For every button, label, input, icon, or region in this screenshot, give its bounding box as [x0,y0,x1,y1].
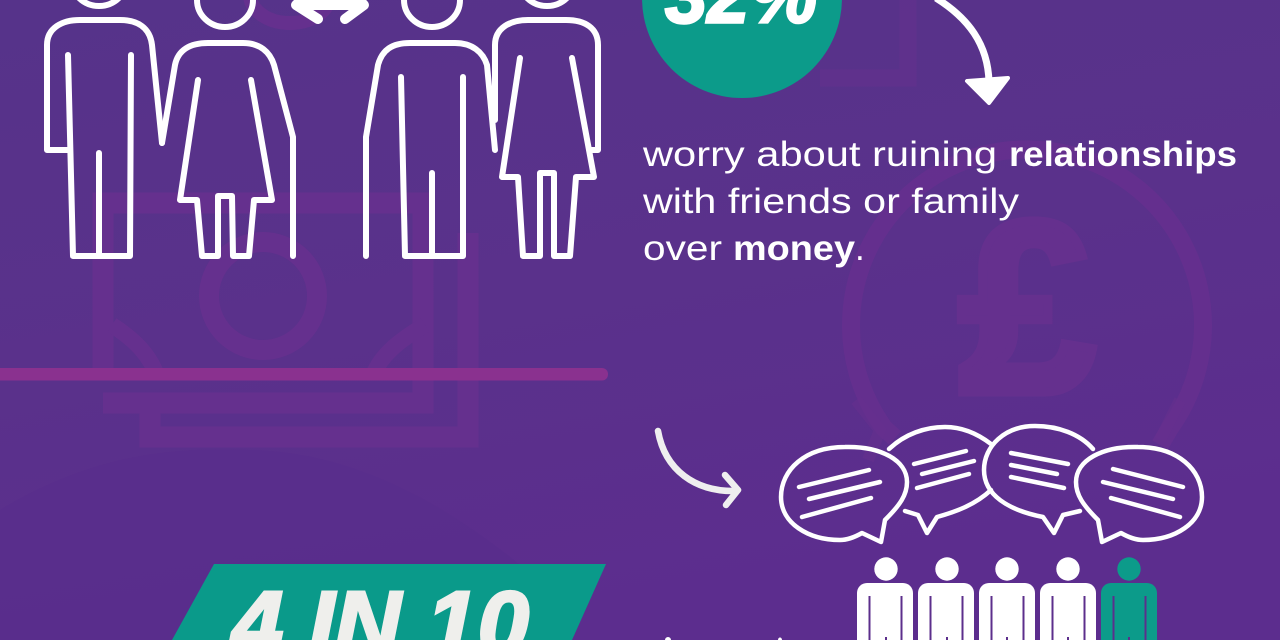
stat banner: 4 in 10 [172,564,606,640]
man one [47,0,162,256]
bubble three [984,426,1093,533]
text block: relationships statement: money [733,229,856,268]
bubble one [781,447,907,542]
text block: relationships statement: with friends or family [642,182,1020,221]
cropped text tops at bottom edge [665,637,782,640]
stat circle: 32% [642,0,842,98]
bubble four [1076,447,1202,542]
text block: relationships statement: over [643,229,722,268]
arrow: circle to text [936,0,1008,103]
bubble two [889,427,991,533]
text block: relationships statement: worry about ruining [642,135,997,174]
divider bar [0,368,608,380]
person 2 [918,557,974,640]
icon: two couples [47,0,598,256]
icon: speech bubbles [781,426,1202,542]
person 5 teal [1101,557,1157,640]
woman one [162,0,293,256]
text block: relationships statement: . [855,229,865,268]
person 4 [1040,557,1096,640]
watermark: banknotes and pound coin [103,0,1203,460]
arrow: curved to speech bubbles [658,431,738,505]
watermark: dark curved shape [0,450,560,640]
watermark: banknotes and pound coin: £ [959,170,1095,444]
text block: relationships statement [642,135,1237,268]
person 3 [979,557,1035,640]
text block: relationships statement: relationships [1009,135,1237,174]
icon row: five people, four white one teal [857,557,1157,640]
icon: double arrow between couples [296,0,364,19]
woman two [495,0,598,256]
person 1 [857,557,913,640]
man two [366,0,495,256]
